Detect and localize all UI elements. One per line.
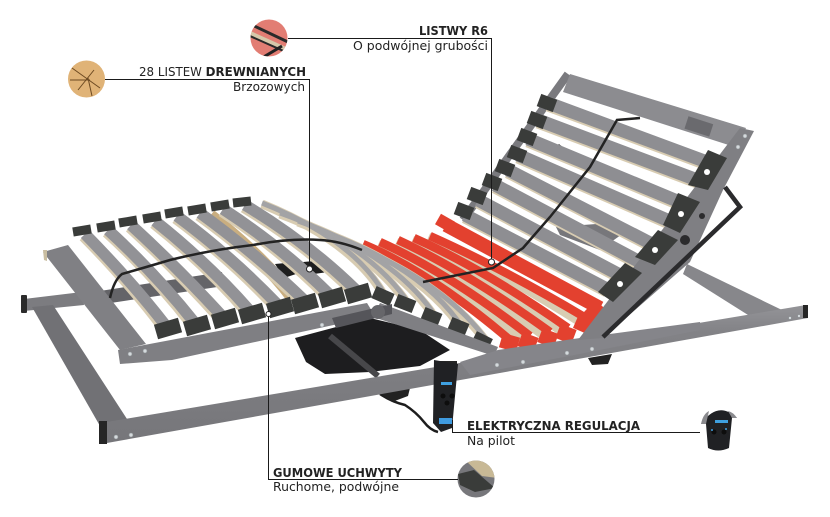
callout: R6 slats [250, 19, 494, 265]
heading: LISTWY R6 [419, 24, 488, 38]
transition curved slats [262, 203, 490, 345]
leader line [452, 420, 700, 432]
callout: birch wood slats [67, 60, 312, 272]
lower base frame [21, 264, 782, 426]
icon: remote control head [701, 410, 737, 450]
heading: GUMOWE UCHWYTY [273, 466, 402, 480]
wooden slat [210, 216, 292, 296]
heading: ELEKTRYCZNA REGULACJA [467, 419, 641, 433]
bed frame product illustration [21, 74, 808, 444]
callout: rubber holders [266, 312, 497, 498]
marker ring [266, 312, 271, 316]
flat slat top caps [73, 201, 251, 232]
raised grey slats [456, 100, 707, 291]
support straps [110, 118, 640, 298]
remote control on bed [433, 360, 458, 432]
motor unit [295, 318, 450, 432]
rail screws [114, 134, 800, 439]
flat slat bottom caps [156, 290, 370, 332]
head plate with logo [563, 74, 746, 148]
description: Brzozowych [233, 80, 305, 94]
leader line [268, 317, 458, 480]
leader line [288, 38, 492, 259]
front rail [107, 305, 808, 443]
flat section frame [43, 245, 375, 364]
icon: red slats [250, 19, 288, 58]
icon: rubber holder detail [457, 460, 497, 498]
red slats [363, 219, 602, 345]
raised slat end caps [598, 150, 727, 302]
backrest support and rear structure [463, 74, 625, 365]
description: Ruchome, podwójne [273, 480, 399, 494]
incline side rail and joint [332, 128, 754, 375]
icon: wood cross-section [68, 60, 105, 98]
rail end caps [99, 305, 808, 444]
callout: electric adjustment [452, 410, 737, 450]
heading: 28 LISTEW DREWNIANYCH [139, 65, 306, 79]
flat grey slats [84, 205, 356, 328]
marker ring [488, 259, 494, 265]
leader line [105, 80, 310, 266]
description: O podwójnej grubości [353, 39, 488, 53]
marker ring [306, 266, 312, 272]
description: Na pilot [467, 434, 515, 448]
